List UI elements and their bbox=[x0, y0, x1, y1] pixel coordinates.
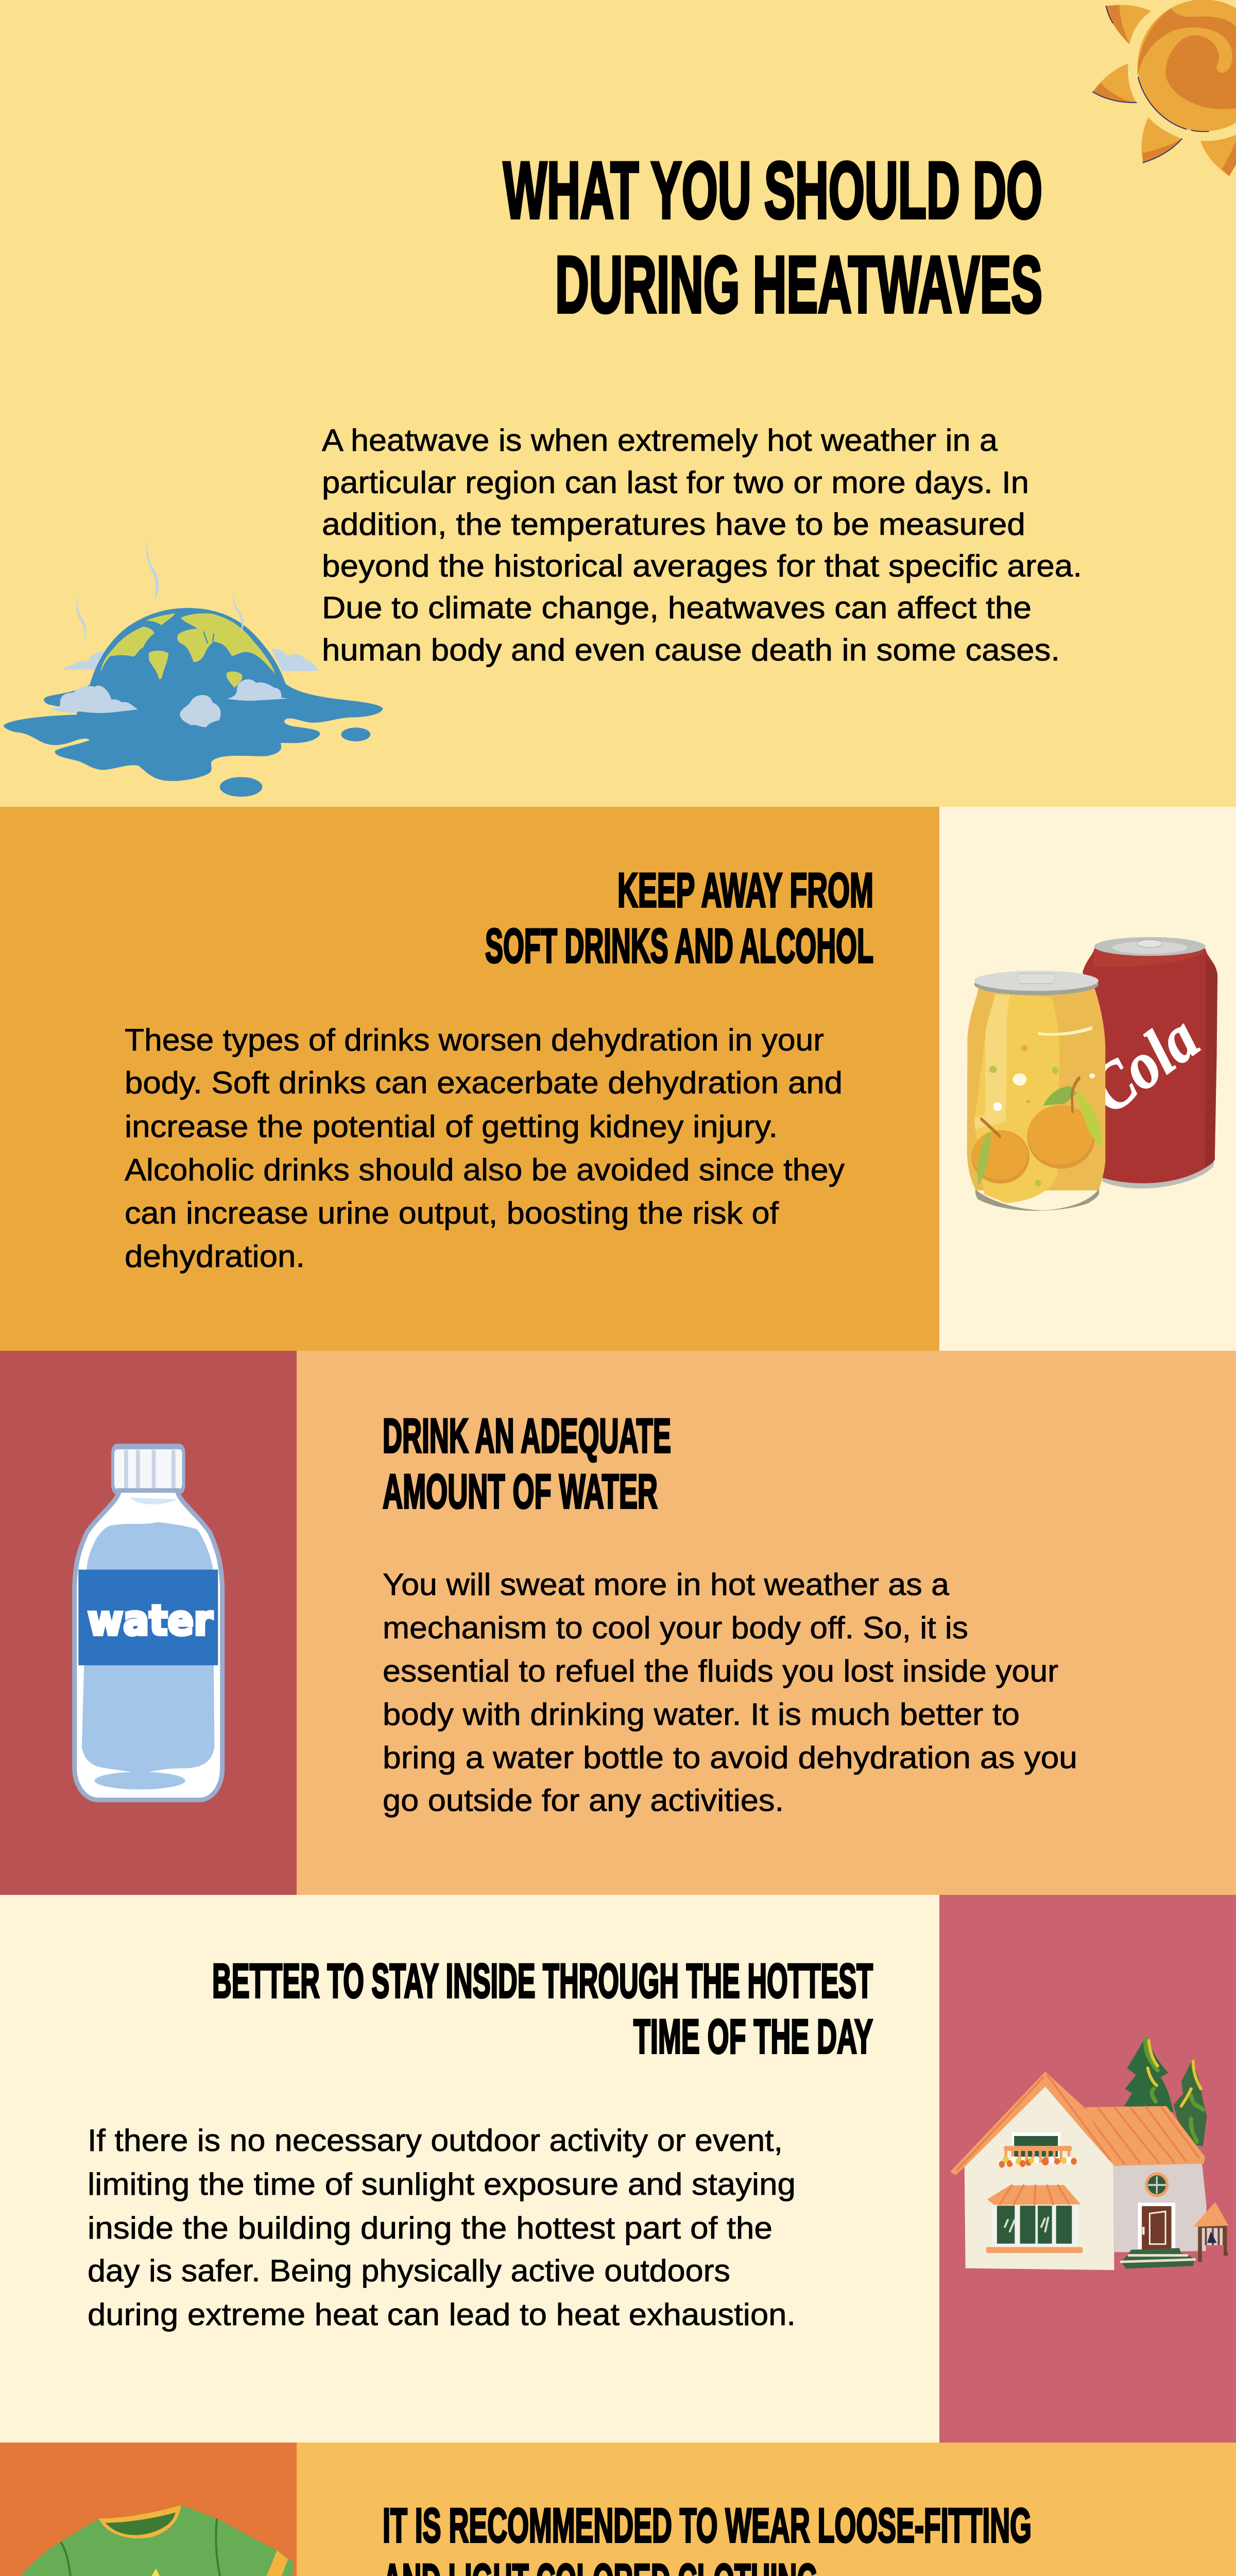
text block: water: essential to refuel the fluids you lost inside your bbox=[383, 1654, 1058, 1688]
text block: stay inside: inside the building during the hottest part of the bbox=[88, 2211, 772, 2245]
text block: water: mechanism to cool your body off. So, it is bbox=[383, 1611, 968, 1645]
panel: stay inside through the hottest time bbox=[0, 1895, 1236, 2443]
icon: cola can bbox=[1076, 937, 1217, 1189]
text block: soft drinks: body. Soft drinks can exacerbate dehydration and bbox=[125, 1065, 843, 1100]
heading: clothing bbox=[383, 2498, 1032, 2576]
heading: soft drinks bbox=[485, 863, 873, 973]
text block: heatwave definition bbox=[322, 423, 1082, 667]
icon: cola can: Cola bbox=[1076, 1001, 1211, 1127]
text block: soft drinks: can increase urine output, boosting the risk of bbox=[125, 1196, 779, 1230]
heading: stay inside bbox=[212, 1954, 873, 2063]
title bbox=[503, 146, 1042, 330]
icon: orange juice can bbox=[967, 971, 1105, 1211]
text block: heatwave definition: addition, the temperatures have to be measured bbox=[322, 507, 1025, 541]
heading: water: AMOUNT OF WATER bbox=[383, 1464, 658, 1518]
heading: stay inside: TIME OF THE DAY bbox=[633, 2009, 873, 2063]
text block: water: go outside for any activities. bbox=[383, 1783, 784, 1818]
heading: soft drinks: KEEP AWAY FROM bbox=[617, 863, 873, 917]
text block: heatwave definition: particular region can last for two or more days. In bbox=[322, 465, 1029, 500]
icon: sun bbox=[1093, 0, 1236, 176]
text block: water: bring a water bottle to avoid dehydration as you bbox=[383, 1740, 1077, 1775]
text block: soft drinks: dehydration. bbox=[125, 1239, 305, 1274]
heading: water: DRINK AN ADEQUATE bbox=[383, 1409, 671, 1463]
text block: stay inside: limiting the time of sunlight exposure and staying bbox=[88, 2167, 796, 2201]
text block: soft drinks: increase the potential of getting kidney injury. bbox=[125, 1109, 778, 1144]
icon: water bottle: water bbox=[88, 1597, 213, 1645]
icon: house bbox=[950, 2037, 1229, 2270]
text block: water: You will sweat more in hot weather as a bbox=[383, 1567, 950, 1602]
text block: heatwave definition: A heatwave is when extremely hot weather in a bbox=[322, 423, 998, 457]
heading: water bbox=[383, 1409, 671, 1518]
text block: soft drinks: These types of drinks worsen dehydration in your bbox=[125, 1023, 824, 1057]
panel: loose-fitting and light-colored clothing bbox=[0, 2443, 1236, 2576]
text block: heatwave definition: human body and even cause death in some cases. bbox=[322, 633, 1060, 667]
heading: soft drinks: SOFT DRINKS AND ALCOHOL bbox=[485, 919, 873, 973]
text block: heatwave definition: beyond the historical averages for that specific area. bbox=[322, 549, 1082, 583]
text block: stay inside: If there is no necessary outdoor activity or event, bbox=[88, 2123, 783, 2158]
panel: keep away from soft drinks and alcohol bbox=[0, 807, 1236, 1351]
text block: stay inside: day is safer. Being physically active outdoors bbox=[88, 2253, 730, 2288]
text block: soft drinks bbox=[125, 1023, 845, 1274]
panel: introduction bbox=[0, 0, 1236, 807]
text block: stay inside: during extreme heat can lead to heat exhaustion. bbox=[88, 2297, 796, 2332]
icon: water bottle bbox=[75, 1447, 222, 1800]
icon: melting earth bbox=[4, 534, 383, 796]
text block: soft drinks: Alcoholic drinks should also be avoided since they bbox=[125, 1153, 845, 1187]
panel: drink an adequate amount of water bbox=[0, 1351, 1236, 1895]
icon: green t-shirt bbox=[2, 2505, 294, 2576]
text block: water: body with drinking water. It is much better to bbox=[383, 1697, 1020, 1732]
text block: stay inside bbox=[88, 2123, 796, 2332]
text block: water bbox=[383, 1567, 1077, 1818]
text block: heatwave definition: Due to climate change, heatwaves can affect the bbox=[322, 590, 1032, 625]
